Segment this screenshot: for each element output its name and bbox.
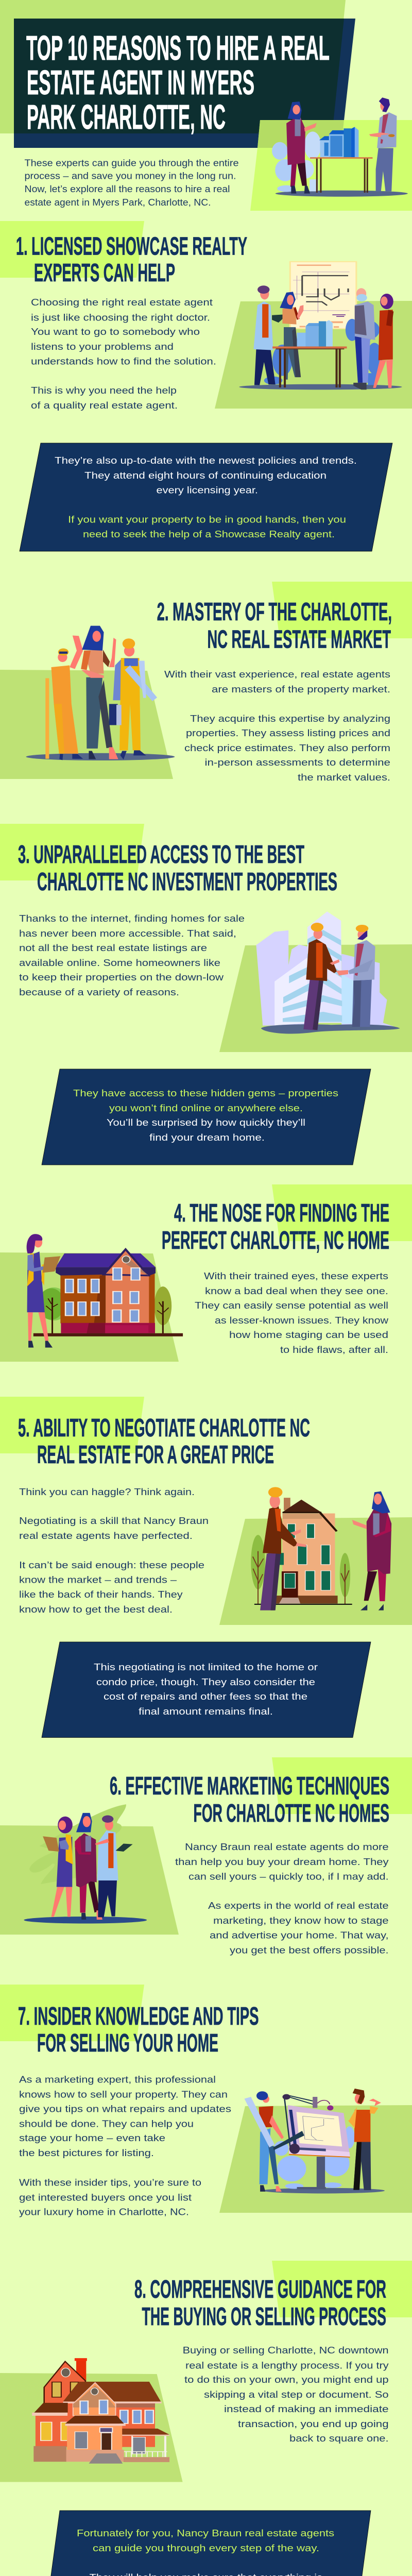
callout: you won’t find online or anywhere else. (109, 1103, 303, 1113)
body text (19, 1486, 209, 1615)
illustration panel (0, 1825, 179, 1935)
illustration: three agents (24, 1804, 147, 1924)
body text: With these insider tips, you’re sure to (19, 2177, 201, 2188)
callout: can guide you through every step of the way. (93, 2543, 319, 2553)
illustration: handshake before towers (256, 911, 400, 1033)
callout: They’re also up-to-date with the newest policies and trends. (55, 455, 357, 466)
highlight tab (272, 2261, 412, 2317)
body text: instead of making an immediate (224, 2403, 389, 2414)
illustration panel (215, 301, 412, 409)
body text: the market values. (298, 772, 390, 783)
illustration panel (219, 944, 412, 1052)
heading (157, 598, 392, 653)
callout: every licensing year. (157, 484, 258, 496)
illustration panel (219, 1517, 412, 1625)
body text: than help you buy your dream home. They (175, 1856, 389, 1867)
illustration: agent with brick house (27, 1234, 183, 1348)
heading (110, 1772, 389, 1827)
body text: Choosing the right real estate agent (31, 297, 213, 308)
body text (175, 1841, 389, 1955)
section 1 (0, 221, 412, 551)
highlight tab (272, 582, 412, 638)
callout: final amount remains final. (139, 1706, 273, 1717)
body text: skipping a vital step or document. So (204, 2389, 389, 2400)
intro text: These experts can guide you through the entire (25, 158, 239, 168)
body text: know a bad deal when they see one. (205, 1285, 388, 1296)
body text: because of a variety of reasons. (19, 987, 179, 997)
body text: to keep their properties on the down-low (19, 972, 224, 982)
section 8 (0, 2261, 412, 2576)
heading (18, 2002, 259, 2057)
intro text: estate agent in Myers Park, Charlotte, NC. (25, 197, 211, 208)
illustration: agents at a townhouse (251, 1487, 391, 1611)
body text: Negotiating is a skill that Nancy Braun (19, 1515, 209, 1526)
heading: EXPERTS CAN HELP (34, 259, 175, 287)
body text: With their vast experience, real estate agents (164, 669, 390, 680)
body text: like the back of their hands. They (19, 1589, 183, 1600)
body text: knows how to sell your property. They can (19, 2089, 228, 2099)
body text (19, 2074, 231, 2217)
highlight tab (272, 1757, 412, 1814)
callout: They attend eight hours of continuing education (84, 470, 327, 481)
heading (162, 1199, 389, 1255)
callout (42, 1642, 371, 1737)
body text: Think you can haggle? Think again. (19, 1486, 195, 1497)
title (26, 29, 330, 137)
callout: If you want your property to be in good hands, then you (68, 514, 346, 525)
body text: back to square one. (289, 2433, 389, 2444)
body text: properties. They assess listing prices and (186, 727, 390, 738)
body text: should be done. They can help you (19, 2119, 194, 2129)
body text: As experts in the world of real estate (208, 1900, 389, 1911)
callout (42, 2511, 371, 2576)
highlight tab (0, 1397, 144, 1453)
callout: They have access to these hidden gems – properties (73, 1088, 338, 1098)
illustration: three builders (26, 626, 175, 760)
heading (16, 232, 247, 287)
body text: listens to your problems and (31, 341, 174, 352)
intro text (25, 158, 239, 208)
callout (42, 1069, 371, 1165)
section 6 (0, 1757, 412, 1955)
body text: real estate agents have perfected. (19, 1530, 193, 1541)
illustration panel (0, 1252, 179, 1362)
callout: condo price, though. They also consider the (96, 1676, 315, 1687)
section 4 (0, 1184, 412, 1362)
heading (18, 840, 337, 896)
callout: This negotiating is not limited to the home or (94, 1662, 318, 1672)
hero illustration: agents with building model (272, 97, 408, 197)
callout: cost of repairs and other fees so that the (104, 1691, 307, 1702)
body text: you get the best offers possible. (230, 1944, 389, 1955)
body text (164, 669, 390, 783)
section 7 (0, 1985, 412, 2217)
body text: your luxury home in Charlotte, NC. (19, 2207, 189, 2217)
hero panel (0, 0, 412, 211)
body text: of a quality real estate agent. (31, 400, 178, 411)
body text: and advertise your home. That way, (210, 1930, 389, 1940)
body text: how home staging can be used (229, 1329, 388, 1340)
highlight tab (0, 1985, 144, 2041)
section 5 (0, 1397, 412, 1737)
body text: As a marketing expert, this professional (19, 2074, 216, 2084)
callout: You’ll be surprised by how quickly they’ll (107, 1117, 305, 1128)
illustration panel (0, 2373, 183, 2482)
highlight tab (0, 824, 144, 880)
callout: find your dream home. (149, 1132, 265, 1143)
body text: has never been more accessible. That said, (19, 928, 236, 939)
illustration: architects at drafting table (244, 2089, 385, 2193)
body text: can sell yours – quickly too, if I may add. (188, 1871, 389, 1882)
body text: They acquire this expertise by analyzing (190, 713, 390, 724)
body text: Nancy Braun real estate agents do more (185, 1841, 389, 1852)
heading: FOR SELLING YOUR HOME (37, 2029, 218, 2057)
body text: the best pictures for listing. (19, 2147, 154, 2158)
heading (18, 1414, 310, 1469)
highlight tab (272, 1184, 412, 1241)
body text: It can’t be said enough: these people (19, 1560, 204, 1570)
body text: to do this on your own, you might end up (184, 2374, 389, 2385)
callout: need to seek the help of a Showcase Realty agent. (83, 529, 335, 539)
callout: Fortunately for you, Nancy Braun real estate agents (77, 2528, 334, 2538)
callout (20, 443, 392, 551)
body text: give you tips on what repairs and updates (19, 2104, 231, 2114)
body text: know the market – and trends – (19, 1574, 177, 1585)
body text: get interested buyers once you list (19, 2192, 192, 2202)
body text: not all the best real estate listings are (19, 942, 207, 953)
body text (183, 2345, 389, 2444)
body text: to hide flaws, after all. (280, 1344, 388, 1355)
highlight tab (0, 221, 144, 278)
body text: stage your home – even take (19, 2132, 165, 2143)
body text: Thanks to the internet, finding homes for sale (19, 913, 245, 924)
body text: as lesser-known issues. They know (215, 1315, 389, 1326)
illustration panel (0, 670, 173, 779)
body text (19, 913, 245, 997)
illustration panel (219, 2105, 412, 2213)
intro text: process – and save you money in the long run. (25, 170, 236, 181)
illustration: team at blueprint (239, 262, 402, 389)
body text: real estate is a lengthy process. If you try (185, 2360, 389, 2371)
illustration: orange victorian house (32, 2358, 169, 2464)
body text (195, 1270, 389, 1355)
body text: With their trained eyes, these experts (204, 1270, 388, 1281)
body text: transaction, you end up going (238, 2418, 389, 2429)
body text: in-person assessments to determine (205, 757, 390, 768)
body text: know how to get the best deal. (19, 1604, 173, 1615)
body text: Buying or selling Charlotte, NC downtown (183, 2345, 389, 2355)
body text: marketing, they know how to stage (213, 1915, 389, 1926)
section 3 (0, 824, 412, 1165)
section 2 (0, 582, 412, 783)
title: PARK CHARLOTTE, NC (27, 98, 226, 137)
body text (31, 297, 216, 411)
body text: You want to go to somebody who (31, 326, 200, 337)
body text: available online. Some homeowners like (19, 957, 220, 968)
body text: This is why you need the help (31, 385, 177, 396)
heading (134, 2275, 386, 2331)
body text: is just like choosing the right doctor. (31, 312, 210, 323)
body text: understands how to find the solution. (31, 355, 216, 367)
body text: check price estimates. They also perform (184, 742, 390, 753)
body text: are masters of the property market. (212, 684, 390, 694)
body text: They can easily sense potential as well (195, 1300, 388, 1311)
intro text: Now, let’s explore all the reasons to hire a real (25, 183, 230, 194)
